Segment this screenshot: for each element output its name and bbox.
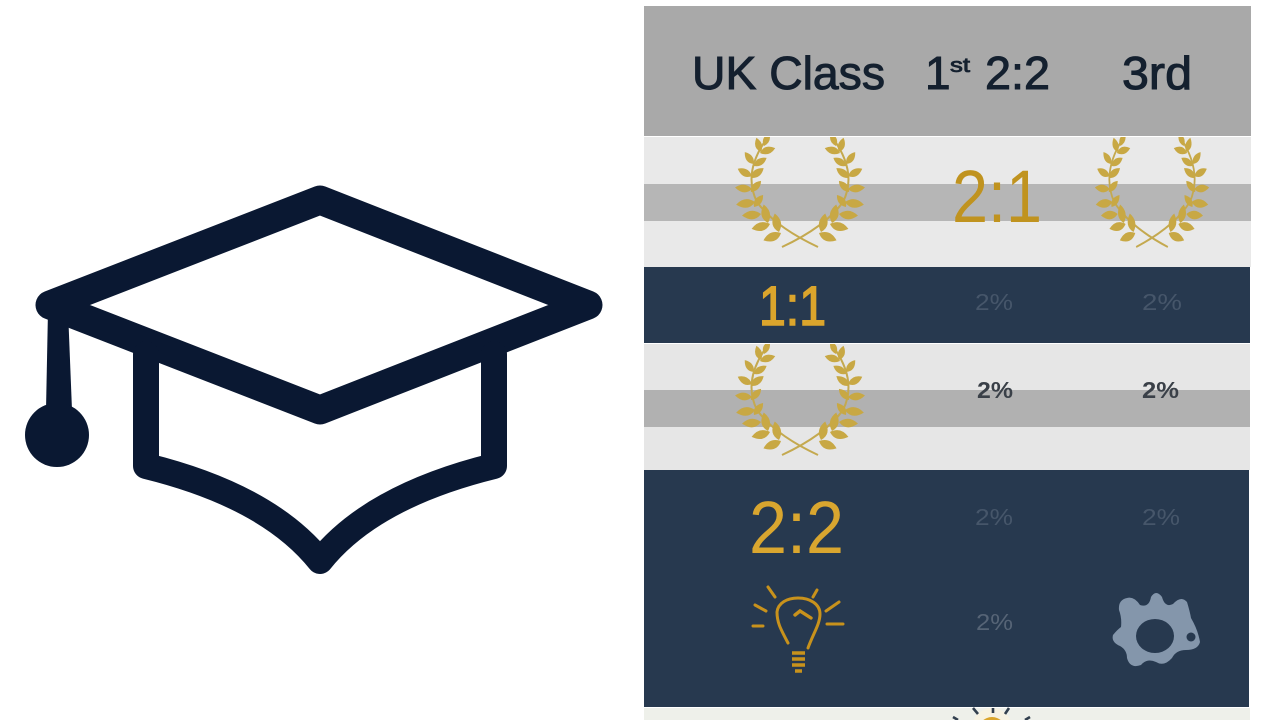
navy row 2 <box>644 470 1249 707</box>
light row 1 <box>644 132 1251 267</box>
icon: laurel wreath <box>735 340 865 455</box>
navy row 1: 2% <box>1142 289 1182 315</box>
light row 2: 2% <box>1142 377 1179 403</box>
cap mortarboard <box>50 200 588 410</box>
value 2:1: 2:1 <box>952 155 1042 238</box>
header row: UK Class <box>692 47 885 99</box>
header row: 2:2 <box>985 47 1050 99</box>
light row 2 <box>644 340 1250 470</box>
table panel <box>644 6 1251 720</box>
icon: gear <box>1113 593 1200 666</box>
navy row 2: 2% <box>975 504 1013 530</box>
light row 2: 2% <box>977 377 1013 403</box>
navy row 2: 2% <box>976 609 1013 635</box>
header row <box>644 6 1251 136</box>
graduation cap icon <box>25 200 588 561</box>
value 1:1: 1:1 <box>759 274 826 337</box>
value 2:2: 2:2 <box>749 486 844 569</box>
cap body <box>146 354 494 561</box>
icon: light bulb <box>753 587 843 671</box>
header row: 1 <box>925 47 951 99</box>
navy row 2: 2% <box>1142 504 1180 530</box>
icon: laurel wreath right <box>1094 132 1210 247</box>
navy row 1: 2% <box>975 289 1013 315</box>
header row: st <box>950 55 971 77</box>
navy row 1 <box>644 267 1250 343</box>
bottom strip with sun <box>644 708 1250 720</box>
header row: 3rd <box>1122 47 1192 99</box>
icon: laurel wreath <box>735 132 865 247</box>
tassel <box>25 310 89 467</box>
